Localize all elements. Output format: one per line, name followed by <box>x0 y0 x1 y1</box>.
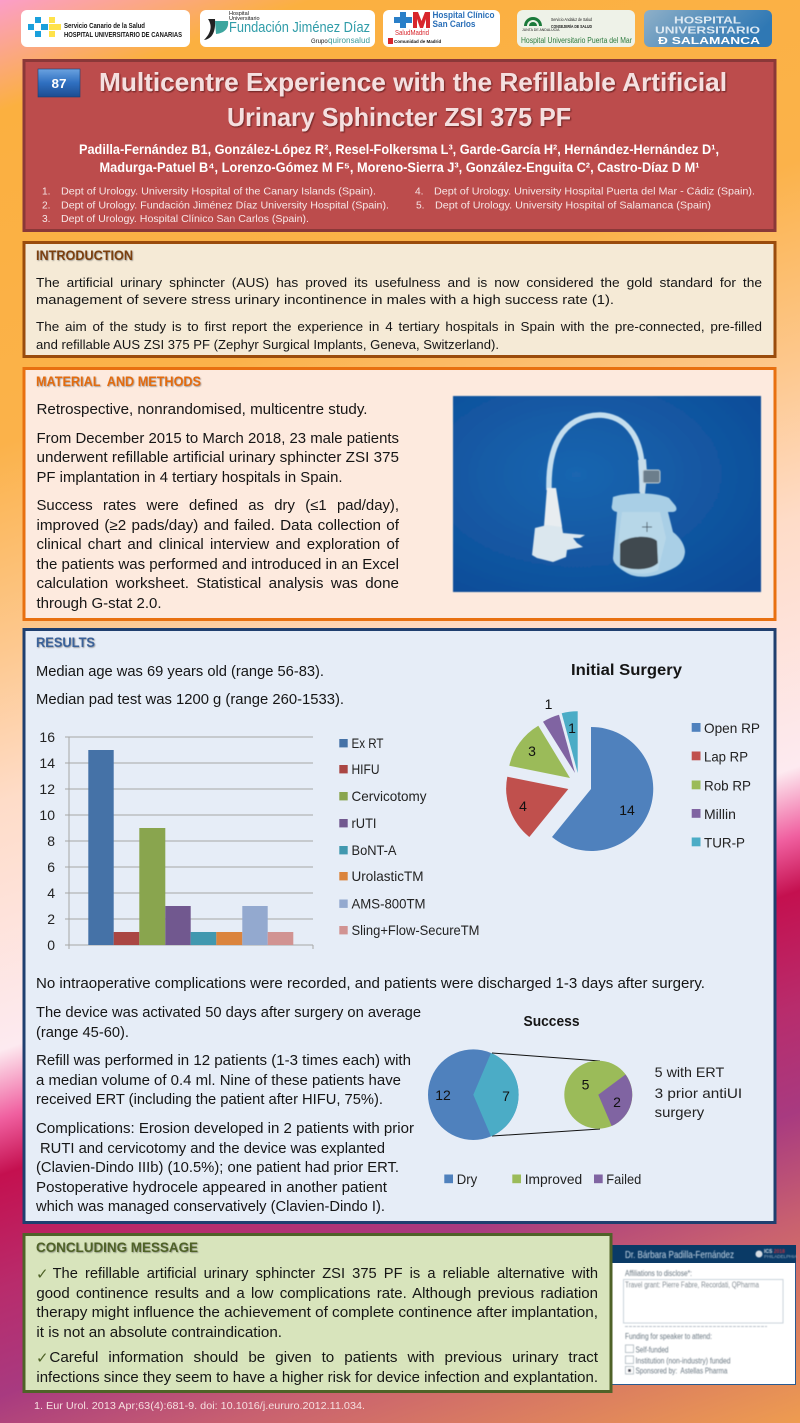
data labels <box>435 1076 621 1110</box>
logo: Hospital Universitario de Canarias: HOSPITAL UNIVERSITARIO DE CANARIAS <box>64 30 182 39</box>
bars <box>88 750 293 945</box>
text: results intro <box>36 664 344 708</box>
logo: Hospital Clínico San Carlos <box>383 10 500 47</box>
data labels: 5 <box>582 1076 590 1092</box>
funding checklist <box>625 1332 730 1376</box>
logo: Hospital Clínico San Carlos: SaludMadrid <box>395 28 429 37</box>
legend: Dry <box>457 1171 477 1187</box>
pie data labels <box>519 696 635 818</box>
logo: Fundación Jiménez Díaz: Fundación Jiménez Díaz <box>229 20 370 36</box>
logo: Hospital Universitario Puerta del Mar: Servicio Andaluz de Salud <box>551 17 592 22</box>
y axis labels <box>39 729 55 953</box>
logo: Hospital Clínico San Carlos: San Carlos <box>432 19 476 30</box>
logo: Hospital Universitario Puerta del Mar: Hospital Universitario Puerta del Mar <box>521 36 632 45</box>
logo: Fundación Jiménez Díaz: Hospital <box>229 11 249 17</box>
ICS logo: PHILADELPHIA <box>764 1254 798 1259</box>
text: authors: Padilla-Fernández B1, González-López R², Resel-Folkersma L³, Garde-García H², Hernández-Hernández D¹, <box>79 142 719 157</box>
text: affiliations: 4. <box>415 186 424 198</box>
text: introduction body: The artificial urinary sphincter (AUS) has proved its usefulness and is now considered the gold standard for the <box>36 275 762 290</box>
text: results follow-up: Postoperative hydrocele appeared in another patient <box>36 1180 387 1196</box>
bar chart legend: Sling+Flow-SecureTM <box>352 922 480 938</box>
logo: Hospital Universitario Puerta del Mar: CONSEJERÍA DE SALUD <box>551 22 593 29</box>
text: results follow-up <box>35 976 705 1215</box>
funding checklist: Self-funded <box>636 1346 668 1354</box>
text: affiliations: 1. <box>42 186 50 198</box>
logo: Hospital Universitario de Salamanca: Ð SALAMANCA <box>658 35 761 47</box>
text: methods body <box>36 402 400 612</box>
pie chart title: Initial Surgery <box>571 662 682 679</box>
pie data labels: 1 <box>568 720 576 736</box>
funding checklist: Funding for speaker to attend: <box>625 1332 712 1341</box>
y axis labels: 16 <box>39 729 55 745</box>
badge: poster number 87: 87 <box>52 76 66 91</box>
affiliations field <box>624 1269 783 1326</box>
text: introduction body: and refillable AUS ZSI 375 PF (Zephyr Surgical Implants, Geneva, Switzerland). <box>36 337 499 352</box>
text: affiliations: Dept of Urology. Hospital Clínico San Carlos (Spain). <box>61 214 309 225</box>
text: results follow-up: (Clavien-Dindo IIIb) (10.5%); one patient had prior ERT. <box>36 1160 399 1176</box>
annotation: 5 with ERT <box>655 1064 725 1080</box>
text: methods body: clinical chart and clinical interview and exploration of <box>36 537 400 553</box>
ICS logo: ICS 2018 <box>764 1249 785 1255</box>
bar chart legend: UrolasticTM <box>352 868 424 884</box>
text: results intro: Median age was 69 years old (range 56-83). <box>36 664 324 680</box>
bar chart legend: Cervicotomy <box>352 788 426 804</box>
logo: Hospital Clínico San Carlos: Comunidad de Madrid <box>394 39 442 44</box>
text: methods body: Success rates were defined as dry (≤1 pad/day), <box>36 498 399 514</box>
legend <box>444 1171 641 1187</box>
legend: Failed <box>606 1171 641 1187</box>
text: introduction body: management of severe stress urinary incontinence in males with a high success rate (1). <box>36 292 614 307</box>
text: methods body: calculation worksheet. Statistical analysis was done <box>36 576 399 592</box>
image: artificial sphincter device photo <box>453 396 761 592</box>
data labels: 7 <box>502 1088 510 1104</box>
heading: concluding message: CONCLUDING MESSAGE <box>36 1240 198 1255</box>
heading: poster title: Multicentre Experience with the Refillable Artificial <box>99 67 727 97</box>
affiliations field: Affiliations to disclose*: <box>625 1269 692 1278</box>
text: affiliations: 3. <box>42 214 50 225</box>
text: affiliations: Dept of Urology. University Hospital Puerta del Mar - Cádiz (Spain). <box>434 186 755 198</box>
logo: Hospital Universitario de Salamanca: UNIVERSITARIO <box>655 24 760 36</box>
text: affiliations: Dept of Urology. University Hospital of Salamanca (Spain) <box>435 200 711 212</box>
text: methods body: PF implantation in 4 tertiary hospitals in Spain. <box>36 470 343 486</box>
pie data labels: 3 <box>528 743 536 759</box>
logo: Fundación Jiménez Díaz: quironsalud <box>328 36 370 45</box>
text: results follow-up: RUTI and cervicotomy and the device was explanted <box>40 1141 385 1157</box>
logo: Hospital Universitario Puerta del Mar <box>517 10 635 47</box>
pie legend: Lap RP <box>704 748 748 764</box>
y axis labels: 2 <box>47 911 55 927</box>
pie legend: Open RP <box>704 720 760 736</box>
text: results follow-up: received ERT (including the patient after HIFU, 75%). <box>36 1092 383 1108</box>
bar chart: prior treatments <box>39 729 480 953</box>
logo: Hospital Universitario de Salamanca <box>644 10 772 47</box>
y axis labels: 14 <box>39 755 55 771</box>
text: results follow-up: The device was activated 50 days after surgery on average <box>36 1005 421 1021</box>
heading: introduction: INTRODUCTION <box>36 248 133 263</box>
panel: title <box>24 60 775 230</box>
text: conclusions: infections since they seem to have a higher risk for device infection and explantation. <box>36 1370 598 1386</box>
text: conclusions: The refillable artificial urinary sphincter ZSI 375 PF is a reliable alternative with <box>53 1266 598 1282</box>
pie of pie chart: success <box>428 1013 742 1187</box>
main pie <box>428 1049 519 1140</box>
text: affiliations <box>42 186 755 225</box>
bar chart legend: rUTI <box>352 815 376 831</box>
data labels: 12 <box>435 1087 451 1103</box>
y axis labels: 8 <box>47 833 55 849</box>
logo: Fundación Jiménez Díaz <box>200 10 375 47</box>
bar chart legend: HIFU <box>352 761 380 777</box>
ICS logo <box>756 1249 798 1259</box>
panel: concluding message <box>24 1234 611 1392</box>
text: methods body: the patients was performed and introduced in an Excel <box>36 557 399 573</box>
text: methods body: From December 2015 to March 2018, 23 male patients <box>36 431 399 447</box>
text: methods body: Retrospective, nonrandomised, multicentre study. <box>36 402 368 418</box>
text: affiliations: Dept of Urology. University Hospital of the Canary Islands (Spain). <box>61 186 376 198</box>
logo: Hospital Clínico San Carlos: Hospital Clínico <box>432 10 495 21</box>
text: reference footnote: 1. Eur Urol. 2013 Apr;63(4):681-9. doi: 10.1016/j.eururo.2012.11.034. <box>34 1400 365 1412</box>
annotation: surgery <box>655 1104 704 1120</box>
speaker name: Dr. Bárbara Padilla-Fernández <box>625 1249 734 1261</box>
funding checklist: Institution (non-industry) funded <box>636 1356 730 1366</box>
text: methods body: underwent refillable artificial urinary sphincter ZSI 375 <box>36 450 399 466</box>
text: introduction body <box>36 275 762 352</box>
bar chart legend: BoNT-A <box>352 842 397 858</box>
text: conclusions: good continence results and a low complications rate. Although previous radiation <box>36 1286 598 1302</box>
text: results follow-up: Refill was performed in 12 patients (1-3 times each) with <box>36 1053 411 1069</box>
text: results follow-up: No intraoperative complications were recorded, and patients were discharged 1-3 days after surgery. <box>36 976 705 992</box>
text: results follow-up: which was managed conservatively (Clavien-Dindo I). <box>35 1199 385 1215</box>
y axis labels: 0 <box>47 937 55 953</box>
logo: Fundación Jiménez Díaz: Universitario <box>229 16 260 22</box>
logo: Hospital Universitario de Salamanca: HOSPITAL <box>674 14 742 26</box>
bar chart legend: AMS-800TM <box>352 896 426 912</box>
text: introduction body: The aim of the study is to first report the experience in 4 tertiary hospitals in Spain with the pre-connected, pre-filled <box>36 319 762 334</box>
funding checklist: Sponsored by: Astellas Pharma <box>636 1366 728 1376</box>
y axis labels: 6 <box>47 859 55 875</box>
secondary pie <box>564 1061 632 1129</box>
text: authors <box>79 142 719 175</box>
panel: results <box>24 630 775 1222</box>
text: results follow-up: a median volume of 0.4 ml. Nine of these patients have <box>36 1073 401 1089</box>
pie legend: TUR-P <box>704 834 745 850</box>
text: authors: Madurga-Patuel B⁴, Lorenzo-Gómez M F⁵, Moreno-Sierra J³, González-Enguita C², Castro-Díaz D M¹ <box>100 160 700 175</box>
text: affiliations: 2. <box>42 200 50 212</box>
chart title: Success <box>524 1013 580 1030</box>
connector lines <box>492 1053 600 1136</box>
pie chart: initial surgery <box>506 662 760 851</box>
text: conclusions <box>36 1265 598 1386</box>
text: results intro: Median pad test was 1200 g (range 260-1533). <box>36 692 344 708</box>
legend: Improved <box>525 1171 582 1187</box>
logo: Hospital Universitario Puerta del Mar: JUNTA DE ANDALUCIA <box>522 28 560 32</box>
annotation: 3 prior antiUI <box>655 1085 742 1101</box>
panel: disclosure slide <box>610 1245 798 1384</box>
bar chart legend: Ex RT <box>352 735 384 751</box>
y axis labels: 10 <box>39 807 55 823</box>
pie legend: Millin <box>704 806 736 822</box>
panel: introduction <box>24 242 775 356</box>
heading: poster title: Urinary Sphincter ZSI 375 PF <box>227 102 571 132</box>
pie slices <box>506 711 653 851</box>
panel: material and methods <box>24 368 775 620</box>
text: results follow-up: (range 45-60). <box>36 1025 129 1041</box>
text: results follow-up: Complications: Erosion developed in 2 patients with prior <box>36 1121 414 1137</box>
heading: results: RESULTS <box>36 635 95 650</box>
pie legend <box>692 720 760 850</box>
heading: poster title <box>99 67 727 132</box>
y axis labels: 4 <box>47 885 55 901</box>
text: conclusions: ✓ <box>36 1349 49 1367</box>
affiliations field: Travel grant: Pierre Fabre, Recordati, QPharma <box>625 1280 759 1290</box>
bar chart legend <box>339 735 480 938</box>
pie data labels: 1 <box>545 696 553 712</box>
badge: poster number 87 <box>38 69 80 97</box>
logo row <box>21 10 772 47</box>
data labels: 2 <box>613 1094 621 1110</box>
text: affiliations: 5. <box>416 200 424 212</box>
text: conclusions: therapy might influence the achievement of complete continence after implantation, <box>36 1305 598 1321</box>
text: conclusions: Careful information should be given to patients with previous urinary tract <box>49 1350 598 1366</box>
text: methods body: improved (≥2 pads/day) and failed. Data collection of <box>36 518 400 534</box>
logo: Hospital Universitario de Canarias <box>21 10 190 47</box>
logo: Fundación Jiménez Díaz: Grupo <box>311 39 328 45</box>
y axis labels: 12 <box>39 781 55 797</box>
pie data labels: 4 <box>519 798 527 814</box>
text: affiliations: Dept of Urology. Fundación Jiménez Díaz University Hospital (Spain). <box>61 200 389 212</box>
pie data labels: 14 <box>619 802 635 818</box>
text: conclusions: ✓ <box>36 1265 49 1283</box>
pie legend: Rob RP <box>704 778 751 794</box>
heading: material and methods: MATERIAL AND METHODS <box>36 374 201 389</box>
text: methods body: through G-stat 2.0. <box>36 596 162 612</box>
logo: Hospital Universitario de Canarias: Servicio Canario de la Salud <box>64 23 145 30</box>
annotation <box>655 1064 742 1120</box>
text: conclusions: it is not an absolute contraindication. <box>36 1325 282 1341</box>
